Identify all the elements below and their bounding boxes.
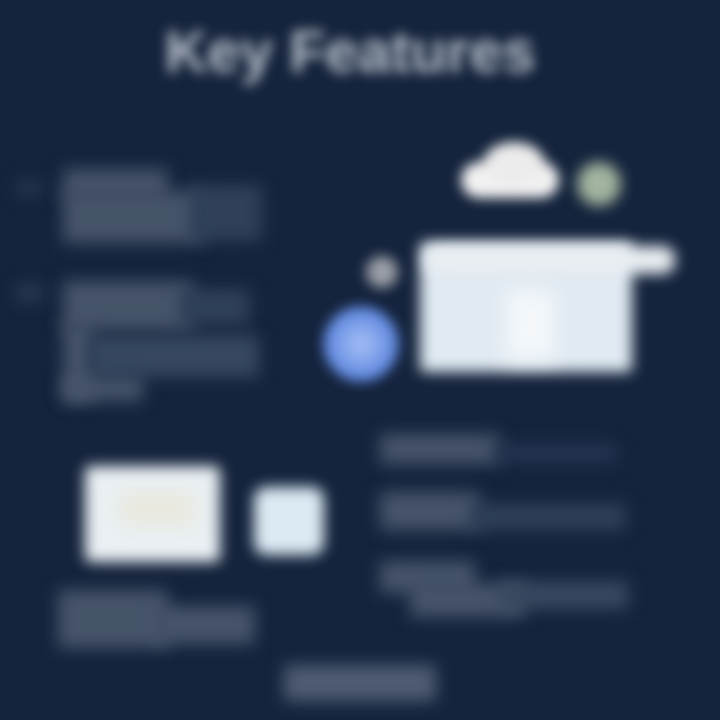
fourth feature text <box>373 485 628 538</box>
fifth feature text <box>373 554 633 624</box>
icon: cloud <box>452 132 568 208</box>
panel: upper left text block <box>21 162 266 250</box>
image: chart card <box>85 466 220 562</box>
third feature text <box>373 427 615 471</box>
panel: lower left text block <box>51 583 262 656</box>
title: Key Features <box>165 19 535 85</box>
bullet: second feature <box>16 285 44 301</box>
illustration: cloud and devices <box>314 132 686 390</box>
first feature text <box>54 162 266 250</box>
chart tint <box>120 491 195 526</box>
bullet: first feature <box>16 181 42 195</box>
panel: middle left text block <box>17 274 264 411</box>
screen highlight <box>505 290 555 360</box>
image: square card <box>254 487 324 555</box>
screen panel <box>420 242 632 372</box>
footer label <box>284 665 436 701</box>
icon: green dot <box>577 162 621 206</box>
screen top bar <box>425 246 675 274</box>
panel: lower right text block <box>373 427 633 624</box>
small grey dot <box>366 256 398 288</box>
icon: blue circle <box>323 306 399 382</box>
second feature text <box>52 274 264 411</box>
